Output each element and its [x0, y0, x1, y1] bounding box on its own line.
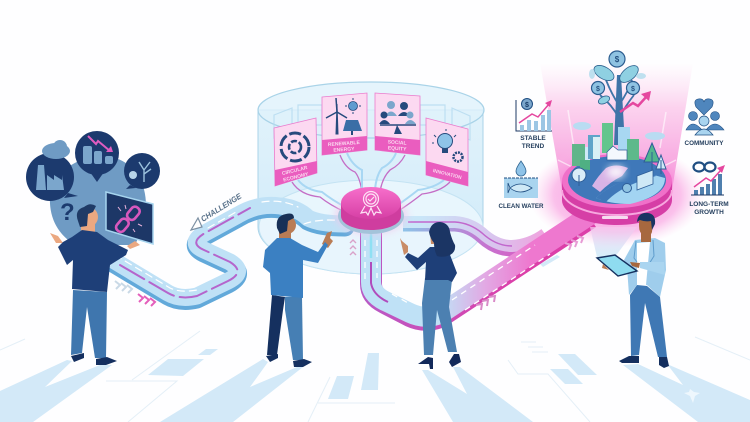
light cone to tablet [590, 227, 637, 257]
icon: dead tree bubble [124, 153, 160, 189]
card: circular economy: CIRCULAR [281, 165, 309, 177]
growth arrow [620, 96, 647, 112]
person: man with shrug [50, 204, 140, 365]
metric: community: COMMUNITY [684, 140, 724, 147]
panel: challenges [26, 131, 160, 365]
question mark: ? [60, 199, 75, 226]
road: challenge route [113, 201, 345, 300]
floating platform [562, 51, 672, 225]
card: renewable energy: RENEWABLE [328, 140, 361, 148]
metric: stable trend: STABLE [520, 135, 546, 142]
links from cards to seal [292, 153, 450, 212]
icon: factory bubble [26, 140, 78, 201]
metric: long-term growth: LONG-TERM [689, 201, 729, 208]
icon: wind turbine and solar panel [326, 98, 362, 135]
person: man pointing [263, 214, 333, 367]
metric: stable trend [516, 98, 552, 150]
card: innovation [426, 118, 468, 186]
metric: clean water: CLEAN WATER [498, 203, 544, 210]
card: circular economy [274, 118, 317, 186]
icon: award rosette [361, 192, 381, 215]
challenge label: CHALLENGE [199, 191, 244, 224]
tree of coins: $ [596, 86, 600, 93]
person: woman pointing [400, 222, 461, 369]
card: innovation: INNOVATION [432, 168, 463, 181]
metric: stable trend: $ [525, 102, 529, 109]
chevrons [115, 236, 583, 310]
monitor: broken chain [106, 192, 153, 244]
metric: long-term growth [689, 162, 729, 216]
card: renewable energy: ENERGY [333, 146, 355, 154]
card: social equity [375, 93, 420, 155]
metric: community [684, 99, 724, 147]
clouds [573, 122, 591, 130]
panel: outcomes beam [529, 63, 705, 247]
metric: clean water [498, 161, 544, 210]
city buildings [572, 123, 639, 170]
trees [572, 143, 666, 192]
tree of coins: $ [631, 86, 635, 93]
backdrop blob [50, 156, 146, 245]
card: social equity: EQUITY [388, 145, 407, 153]
card: renewable energy [322, 93, 367, 155]
icon: warning triangle [191, 218, 202, 230]
tree of coins: $ [615, 55, 620, 64]
icon: people on balance scale [379, 101, 416, 134]
icon: falling coins bubble [75, 131, 119, 182]
metric: stable trend: TREND [522, 143, 544, 150]
seal button [335, 187, 407, 234]
person: man with tablet [597, 213, 669, 368]
challenge label [191, 191, 244, 230]
card: circular economy: ECONOMY [283, 171, 310, 184]
icon: recycling loop [281, 133, 309, 161]
icon: light bulb and gear [432, 129, 462, 162]
metric: long-term growth: GROWTH [694, 209, 724, 216]
holographic cylinder [258, 82, 484, 274]
card: social equity: SOCIAL [387, 139, 407, 147]
tree of coins [589, 51, 646, 145]
road: central to right route [365, 215, 590, 320]
